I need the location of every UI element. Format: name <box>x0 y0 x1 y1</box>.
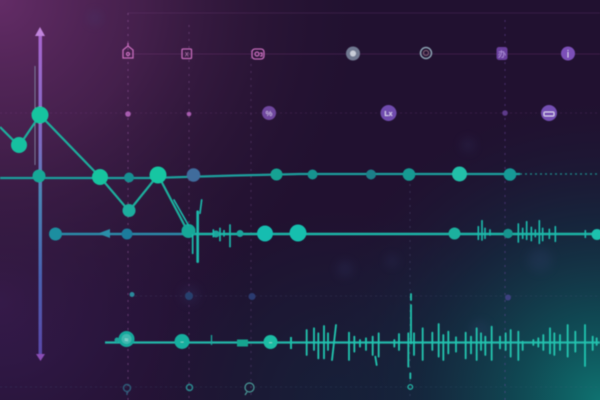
icon: purple info <box>561 46 575 60</box>
top row icons <box>123 43 575 60</box>
waveform spikes <box>307 294 597 378</box>
icon: percent badge <box>262 106 276 120</box>
icon: camera <box>252 49 264 59</box>
icon: Lx badge: Lx <box>384 111 393 118</box>
icon: square glyph: X <box>185 52 189 58</box>
icon: minus badge <box>541 105 557 121</box>
second row markers <box>125 105 557 121</box>
icon: purple info: i <box>567 50 569 60</box>
marker: small purple dot <box>502 110 508 116</box>
timeline 2 with waveform <box>49 200 600 262</box>
bottom row ring icons <box>124 383 413 395</box>
waveform left nodes: − <box>269 340 273 346</box>
vertical axis arrow <box>35 27 45 361</box>
line chart zigzag <box>0 106 188 232</box>
icon: purple tile: 办 <box>498 49 506 59</box>
marker: small pink dots <box>125 111 191 117</box>
icon: purple tile <box>496 47 508 60</box>
icon: Lx badge <box>380 105 396 121</box>
timeline 1 <box>0 166 600 185</box>
bottom waveform timeline <box>105 294 600 378</box>
icon: percent badge: % <box>266 109 273 118</box>
lower faint markers <box>130 292 511 300</box>
waveform left nodes: − <box>180 340 184 346</box>
waveform left nodes: ≈ <box>125 337 129 344</box>
icon: grey ring <box>420 48 432 58</box>
waveform left nodes <box>114 331 291 349</box>
icon: home <box>123 43 133 58</box>
icon: grey disc <box>346 46 360 60</box>
icon: square glyph <box>182 49 192 58</box>
